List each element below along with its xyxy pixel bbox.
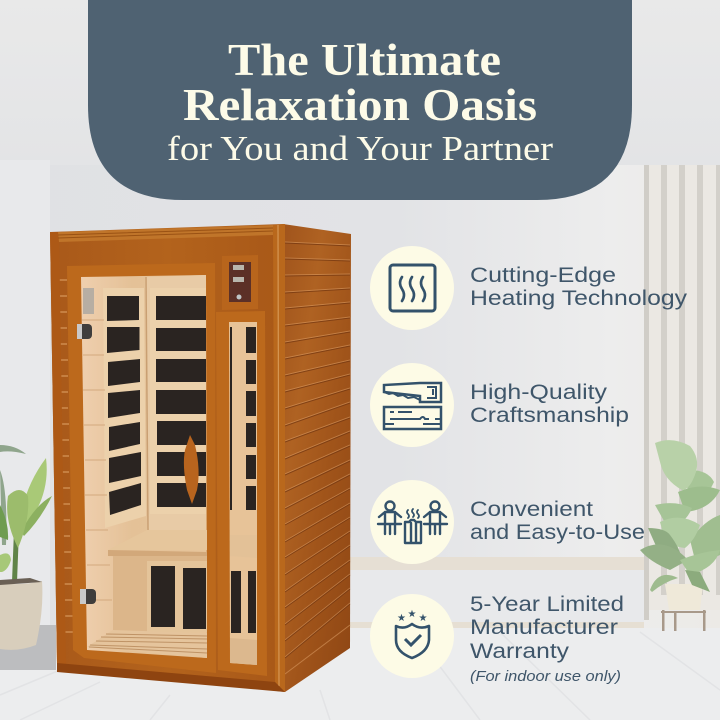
right plant <box>640 440 720 631</box>
icon: shield with stars: ★ <box>419 613 428 624</box>
wall bench <box>350 557 644 631</box>
door glass interior <box>81 275 207 658</box>
text: easy to use: and Easy-to-Use <box>470 521 645 544</box>
text: easy to use <box>470 498 645 544</box>
header banner <box>88 0 632 200</box>
icon: shield with stars: ★ <box>408 609 417 620</box>
side window interior <box>229 322 257 665</box>
title: Relaxation Oasis <box>183 79 537 130</box>
plant stand <box>661 610 706 631</box>
sauna cabin <box>50 224 351 692</box>
text: heating technology: Cutting-Edge <box>470 264 616 287</box>
text: warranty: (For indoor use only) <box>470 668 621 685</box>
sign label <box>83 288 94 314</box>
feature 1: heating <box>370 246 688 330</box>
text: heating technology: Heating Technology <box>470 287 688 310</box>
text: warranty <box>470 593 624 685</box>
icon: shield with stars <box>370 594 454 678</box>
floor slats <box>87 630 207 658</box>
door handle <box>184 435 199 504</box>
icon: two people with heater <box>370 480 454 564</box>
side window frame <box>216 311 267 676</box>
sauna corner posts <box>50 224 285 692</box>
icon: heating waves <box>370 246 454 330</box>
heater panels left <box>107 296 141 515</box>
floor <box>0 625 720 720</box>
title: for You and Your Partner <box>167 129 553 168</box>
feature 4: warranty <box>370 593 624 685</box>
feature 3: easy to use <box>370 480 645 564</box>
text: warranty: 5-Year Limited <box>470 593 624 616</box>
text: craftsmanship: Craftsmanship <box>470 404 629 427</box>
sauna front wall <box>50 224 285 692</box>
bench <box>108 530 207 632</box>
sauna side wall <box>283 224 351 692</box>
text: warranty: Warranty <box>470 640 570 663</box>
text: craftsmanship: High-Quality <box>470 381 608 404</box>
door frame <box>67 263 216 673</box>
icon: saw and plank <box>370 363 454 447</box>
wooden wall slats <box>644 165 720 620</box>
sauna crown moulding <box>58 225 273 242</box>
text: heating technology <box>470 264 688 310</box>
feature 2: craftsmanship <box>370 363 629 447</box>
sauna base <box>57 663 285 692</box>
title <box>167 34 553 168</box>
text: easy to use: Convenient <box>470 498 593 521</box>
door hinges <box>77 324 96 604</box>
left plant <box>0 445 52 650</box>
control panel <box>222 255 258 310</box>
heater panels right <box>156 296 206 507</box>
text: warranty: Manufacturer <box>470 616 618 639</box>
title: The Ultimate <box>228 34 501 85</box>
icon: shield with stars: ★ <box>397 613 406 624</box>
wood wall frames <box>103 288 146 528</box>
text: craftsmanship <box>470 381 629 427</box>
